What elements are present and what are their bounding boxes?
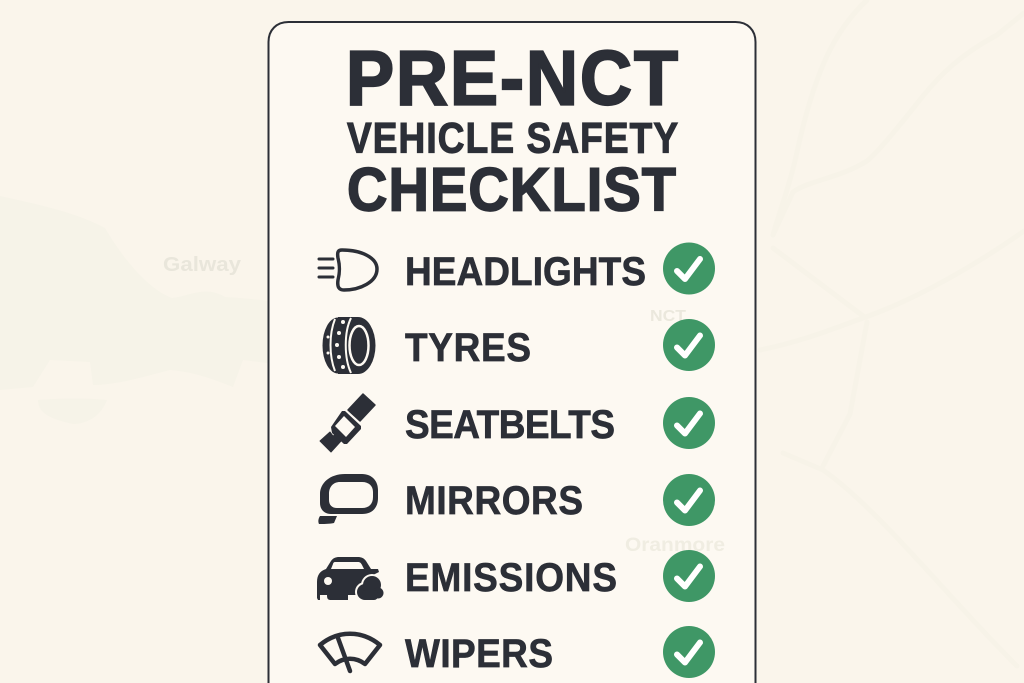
icon: seatbelt xyxy=(320,394,375,452)
map label: Oranmore: Oranmore xyxy=(625,535,725,556)
check: tyres xyxy=(663,319,715,371)
map label: NCT: NCT xyxy=(650,308,686,325)
check: headlights xyxy=(663,242,715,294)
map label: Galway: Galway xyxy=(163,254,242,276)
icon: mirror xyxy=(318,474,378,524)
row: mirrors xyxy=(318,474,715,526)
label: tyres: TYRES xyxy=(405,326,531,370)
check: emissions xyxy=(663,550,715,602)
title: VEHICLE SAFETY xyxy=(347,115,678,162)
check: mirrors xyxy=(663,474,715,526)
row: seatbelts xyxy=(320,394,715,452)
label: seatbelts: SEATBELTS xyxy=(405,403,615,447)
title xyxy=(346,35,678,224)
icon: car with exhaust xyxy=(317,557,385,602)
row: emissions xyxy=(317,550,715,602)
icon: wiper xyxy=(320,634,380,671)
icon: tyre xyxy=(322,317,376,374)
title: PRE-NCT xyxy=(346,35,678,121)
check: seatbelts xyxy=(663,397,715,449)
icon: headlight xyxy=(319,250,377,290)
title: CHECKLIST xyxy=(347,156,676,224)
label: headlights: HEADLIGHTS xyxy=(405,250,646,294)
label: wipers: WIPERS xyxy=(405,632,553,676)
label: emissions: EMISSIONS xyxy=(405,556,617,600)
check: wipers xyxy=(663,626,715,678)
row: headlights xyxy=(319,242,715,294)
row: wipers xyxy=(320,626,715,678)
panel: checklist card xyxy=(268,22,756,683)
label: mirrors: MIRRORS xyxy=(405,479,583,523)
row: tyres xyxy=(322,317,715,374)
